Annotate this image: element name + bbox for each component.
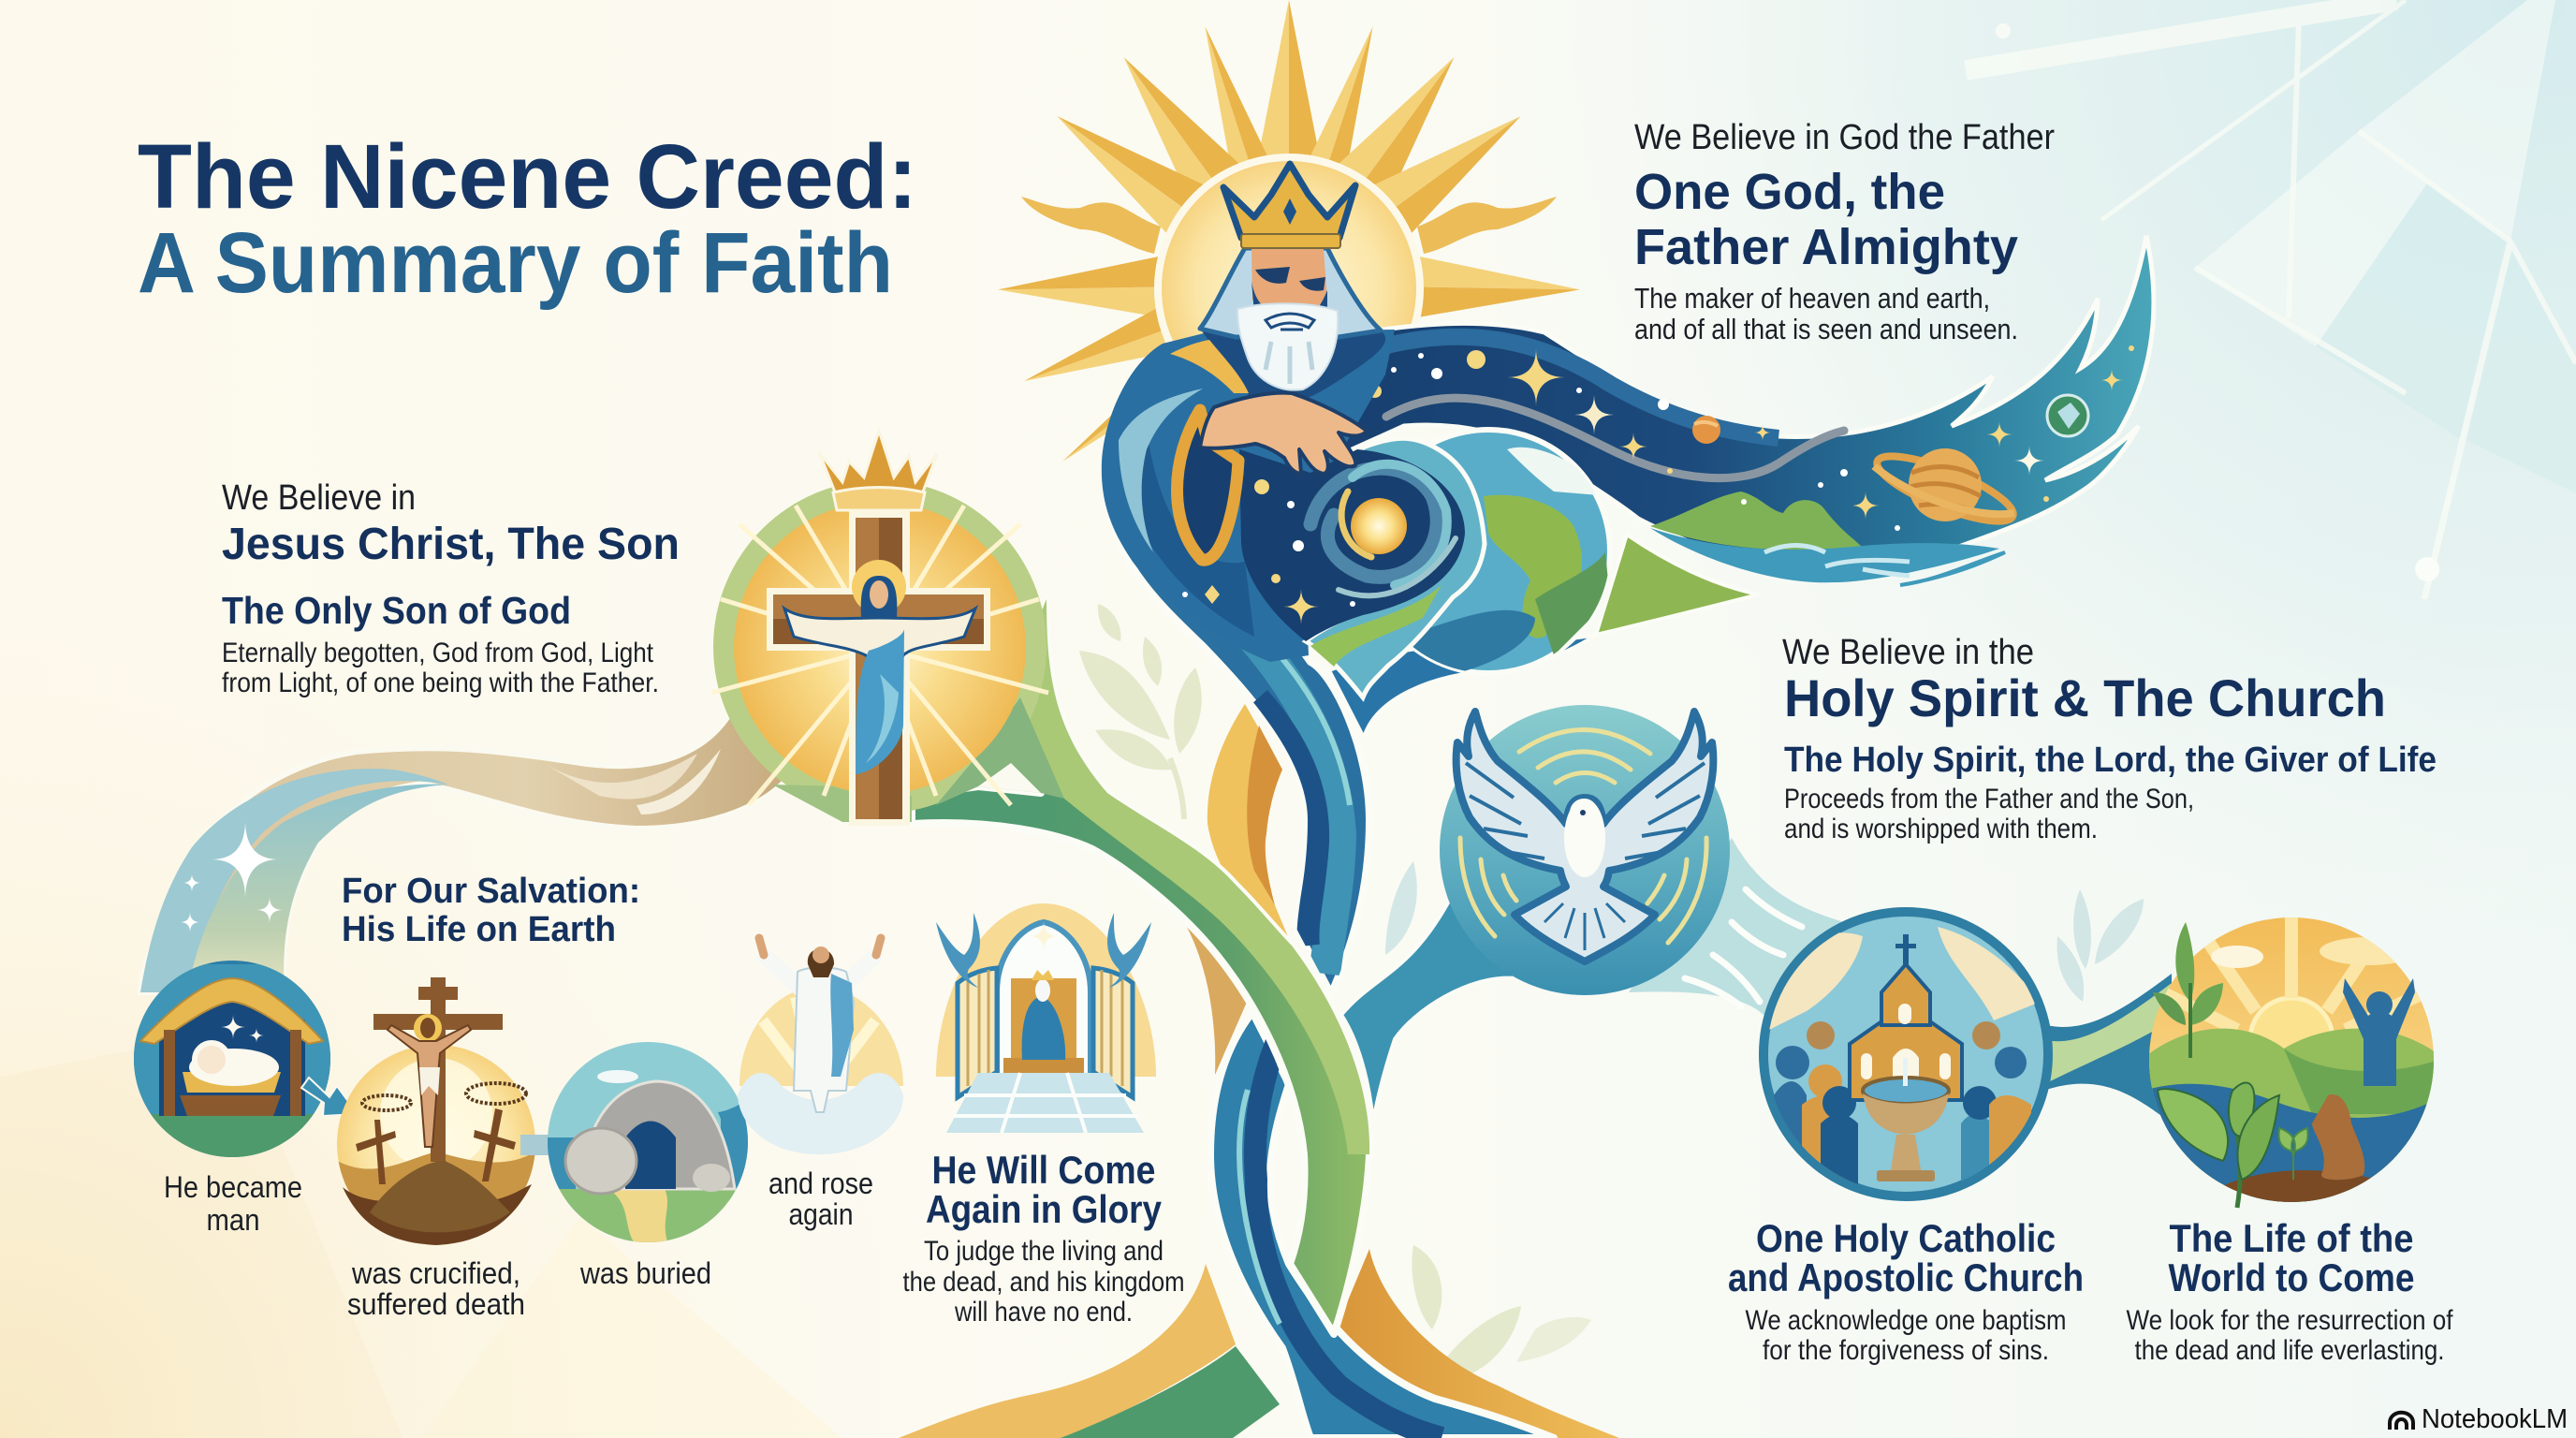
text block: Holy Spirit and the Church: and is worshipped with them.: [1784, 814, 2098, 844]
lower-right green join: [936, 697, 1064, 805]
panel: Son cross medallion: [711, 431, 1064, 826]
gold sun disc: [734, 502, 1026, 794]
text block: God the Father: and of all that is seen and unseen.: [1634, 313, 2018, 345]
heading: for our salvation: For Our Salvation:: [342, 872, 640, 911]
icon: baptismal font: [1863, 1058, 1949, 1181]
strand: gold wedge: [1177, 910, 1248, 1075]
text block: church: One Holy Catholic: [1756, 1216, 2056, 1260]
gold arcs: [1460, 729, 1706, 943]
text block: he will come again: will have no end.: [954, 1297, 1133, 1328]
lower-left green join: [772, 785, 912, 822]
text block: life of the world to come: World to Come: [2168, 1255, 2415, 1299]
teal swirl rim: [1306, 438, 1485, 697]
timeline captions: and rose: [768, 1167, 873, 1200]
navy robe interior with spiral: [1239, 449, 1465, 641]
text block: Jesus Christ the Son: The Only Son of God: [222, 589, 571, 632]
text block: Jesus Christ the Son: [222, 478, 680, 698]
text block: God the Father: One God, the: [1634, 164, 1945, 220]
cross: [767, 511, 990, 826]
timeline captions: was buried: [579, 1256, 711, 1290]
heading: for our salvation: His Life on Earth: [342, 910, 616, 949]
icon: empty tomb: [548, 1042, 749, 1255]
text block: Jesus Christ the Son: Eternally begotten, God from God, Light: [222, 638, 654, 668]
icon: throne in glory: [936, 903, 1156, 1133]
hills: [2149, 1028, 2434, 1202]
trunk: intertwined strands: [899, 565, 1619, 1438]
stream to church: [1629, 838, 1844, 1030]
timeline captions: suffered death: [347, 1287, 525, 1321]
robe dark fold: [1119, 431, 1254, 637]
text block: life of the world to come: the dead and life everlasting.: [2134, 1335, 2445, 1366]
icon: crucifixion: [337, 977, 535, 1255]
sleeves: [766, 957, 874, 989]
timeline captions: He became: [164, 1170, 302, 1204]
connector bar: [520, 1135, 565, 1155]
planets: [1692, 395, 2088, 534]
text block: Jesus Christ the Son: from Light, of one being with the Father.: [222, 668, 659, 698]
icon: crown over the cross: [819, 431, 937, 510]
strand: green highlight: [1016, 599, 1369, 1154]
ribbon: tan and blue stream from the cross to the nativity: [140, 679, 796, 992]
stream between church and life medallions: [2031, 974, 2172, 1123]
raised-arms figure: [2343, 978, 2415, 1086]
text block: he will come again: [902, 1148, 1185, 1328]
panel: life of the world to come medallion: [2144, 917, 2443, 1217]
text block: God the Father: The maker of heaven and earth,: [1634, 282, 1990, 315]
panel: his life on earth timeline: [134, 903, 1156, 1255]
icon: risen Christ: [738, 938, 903, 1154]
robe light folds: [1119, 389, 1203, 552]
flowing cosmic cloak: [1310, 236, 2154, 567]
text block: he will come again: He Will Come: [932, 1148, 1155, 1192]
icon: nativity: [134, 961, 330, 1170]
crown: [1223, 164, 1355, 238]
light rays: [711, 506, 1048, 805]
text block: God the Father: Father Almighty: [1634, 219, 2018, 275]
text block: life of the world to come: [2127, 1216, 2453, 1366]
clouds: [2211, 946, 2263, 968]
timeline captions: again: [788, 1197, 854, 1231]
swoosh inside cloak: [1386, 398, 1844, 478]
spur: [1900, 552, 2005, 585]
cloak upper fold: [1376, 337, 1778, 438]
church building: [1848, 1020, 1964, 1102]
text block: Holy Spirit and the Church: Holy Spirit & The Church: [1784, 668, 2386, 727]
left robe body: [1102, 330, 1395, 662]
Christ figure: [784, 560, 975, 774]
head: [808, 949, 834, 977]
teal disc behind dove: [1440, 705, 1730, 995]
hill and thorn nest: [343, 1184, 532, 1245]
face: [1251, 249, 1327, 314]
small cosmic dots on the robe: [1182, 479, 1355, 624]
feathers: [1466, 763, 1705, 950]
wavy sun rays: [1021, 197, 1557, 254]
green streak: [1310, 585, 1442, 667]
clouds: [738, 1073, 903, 1154]
branch from trunk to dove: [1341, 892, 1516, 1122]
strand details: blue upper: [1241, 649, 1356, 976]
text block: Holy Spirit and the Church: [1782, 633, 2437, 844]
text block: life of the world to come: The Life of the: [2170, 1216, 2413, 1260]
NotebookLM logo: NotebookLM: [2422, 1404, 2568, 1434]
panel: church medallion: [1764, 912, 2048, 1198]
text block: Holy Spirit and the Church: The Holy Spirit, the Lord, the Giver of Life: [1784, 741, 2437, 780]
strand: blue upper: [1105, 449, 1369, 994]
title: The Nicene Creed:: [138, 125, 917, 227]
kneeling woman: [2312, 1094, 2364, 1180]
text block: he will come again: Again in Glory: [926, 1187, 1163, 1231]
text block: Jesus Christ the Son: We Believe in: [222, 478, 416, 518]
strand: blue lower: [1210, 1012, 1554, 1438]
galaxy spiral: [1310, 464, 1456, 595]
timeline captions: was crucified,: [351, 1256, 520, 1290]
landscape in cloak: water: [1650, 528, 1999, 582]
radiance: [739, 987, 903, 1086]
arrow: [718, 1078, 773, 1123]
sun: [2248, 996, 2334, 1049]
title: A Summary of Faith: [138, 215, 893, 311]
heading: for our salvation: [342, 872, 640, 949]
strand: gold lower left: [899, 1264, 1236, 1438]
text block: church: for the forgiveness of sins.: [1763, 1335, 2049, 1366]
stars and dots in cloak: [1368, 345, 2134, 531]
text block: he will come again: the dead, and his kingdom: [902, 1267, 1185, 1298]
hand: [1200, 393, 1367, 474]
strand: gold lower right: [1334, 1249, 1619, 1438]
blue tail under earth: [1329, 635, 1596, 738]
gold sleeve: [1178, 410, 1238, 560]
dove branch and Spirit stream: [1341, 705, 1844, 1122]
text block: church: [1728, 1216, 2084, 1366]
medallion halo: [713, 480, 1046, 814]
strand details: blue lower: [1239, 1039, 1442, 1438]
hair: [1200, 248, 1381, 337]
text block: church: and Apostolic Church: [1728, 1255, 2084, 1299]
text block: life of the world to come: We look for the resurrection of: [2127, 1305, 2453, 1336]
congregation figures: [1774, 1021, 2031, 1198]
sun rays: [997, 0, 1581, 475]
background leaves: [1079, 604, 2144, 1381]
arrow: [301, 1078, 358, 1116]
navy foreground: [2152, 1084, 2426, 1202]
icon: dove: [1456, 712, 1713, 961]
text block: church: We acknowledge one baptism: [1745, 1305, 2067, 1336]
panel: Father figure, cosmos and earth: [997, 0, 2154, 738]
text block: God the Father: We Believe in God the Father: [1634, 118, 2055, 157]
gold collar: [1170, 340, 1249, 393]
strand: green root: [1061, 1346, 1280, 1438]
text block: Holy Spirit and the Church: Proceeds from the Father and the Son,: [1784, 784, 2194, 814]
beard: [1237, 303, 1338, 390]
green tail: [1596, 535, 1759, 635]
timeline captions: man: [206, 1203, 260, 1237]
text block: God the Father: [1634, 118, 2055, 345]
earth: [1412, 427, 1608, 673]
big plant leaves: [2153, 922, 2308, 1208]
strand: gold upper: [1208, 704, 1292, 946]
shoulder navy: [1200, 329, 1385, 405]
strand: green main: [912, 599, 1369, 1334]
timeline captions: [164, 1167, 873, 1321]
landscape in cloak: hills: [1650, 492, 1863, 550]
robe: [794, 968, 854, 1112]
text block: Holy Spirit and the Church: We Believe in the: [1782, 633, 2034, 672]
title: [138, 125, 917, 311]
halo: [1158, 157, 1420, 419]
text block: Jesus Christ the Son: Jesus Christ, The Son: [222, 520, 680, 569]
text block: he will come again: To judge the living and: [924, 1236, 1164, 1267]
world map continents: [1769, 932, 1863, 1030]
star of Bethlehem: [180, 820, 283, 932]
